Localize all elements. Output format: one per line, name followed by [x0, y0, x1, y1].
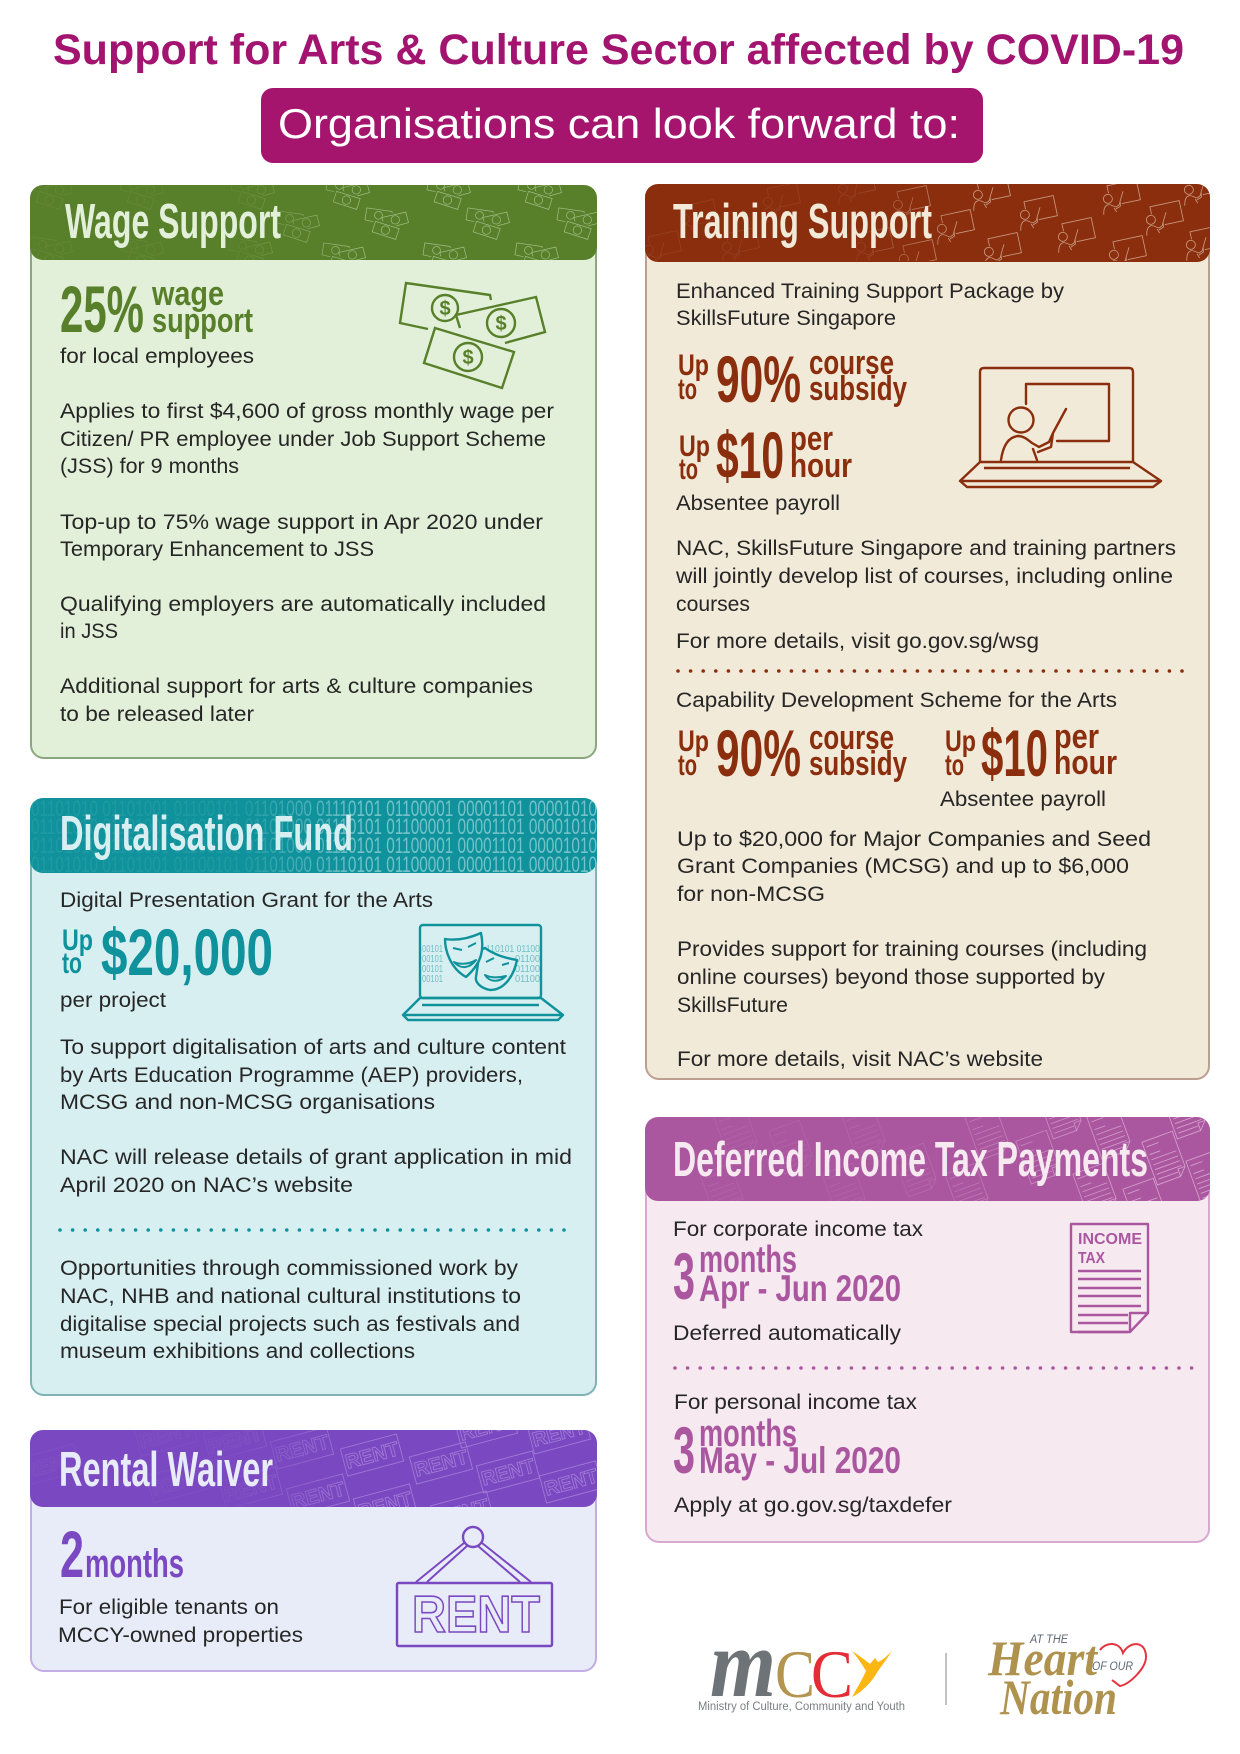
icon: laptop with theatre masks: 00101 — [422, 974, 443, 985]
text: training course details: Capability Development Scheme for the Arts — [676, 689, 1117, 712]
text: training course details: will jointly develop list of courses, including online — [675, 565, 1173, 588]
stat: up to $10 per hour (CDS): Up — [945, 725, 976, 758]
heading: rental waiver: RENT — [206, 1423, 264, 1459]
text: capability scheme details: Up to $20,000 for Major Companies and Seed — [677, 828, 1151, 851]
heading: digitalisation fund — [30, 796, 597, 877]
heading: rental waiver: RENT — [479, 1455, 537, 1491]
text: rental details — [58, 1596, 303, 1647]
stat: up to 90% course subsidy: course — [809, 344, 894, 382]
text: wage support details: Additional support for arts & culture companies — [60, 675, 533, 698]
stat: 2 months: months — [85, 1542, 184, 1586]
text: capability scheme details: SkillsFuture — [677, 994, 788, 1017]
logo: At the Heart of Our Nation: OF OUR — [1092, 1659, 1133, 1673]
icon: income tax document: TAX — [1078, 1250, 1106, 1267]
subtitle banner — [261, 88, 983, 163]
text: digitalisation details: museum exhibitions and collections — [60, 1340, 415, 1363]
panel: digitalisation fund — [30, 796, 597, 1395]
panel: wage support — [29, 178, 601, 758]
heading: rental waiver: RENT — [542, 1465, 600, 1501]
icon: banknotes: $ — [439, 298, 451, 320]
text: wage support details: Qualifying employers are automatically included — [60, 593, 546, 616]
logo: MCCY: Ministry of Culture, Community and Youth — [698, 1701, 905, 1713]
logo: At the Heart of Our Nation: AT THE — [1029, 1634, 1068, 1646]
text: capability scheme details: Provides support for training courses (including — [677, 938, 1147, 961]
icon: income tax document — [1071, 1224, 1148, 1332]
icon: laptop with theatre masks: 00101 — [422, 944, 443, 955]
text: wage support details: Temporary Enhancement to JSS — [60, 538, 374, 561]
stat: 3 months Apr - Jun 2020: Apr - Jun 2020 — [699, 1268, 901, 1309]
stat: up to $10 per hour (CDS): to — [945, 749, 964, 782]
stat: up to $10 per hour (CDS): per — [1054, 718, 1099, 756]
text: digitalisation details: NAC will release details of grant application in mid — [60, 1146, 572, 1169]
stat: up to 90% course subsidy (CDS): Up — [678, 725, 709, 758]
icon: laptop with teacher — [960, 368, 1161, 487]
logo: At the Heart of Our Nation: Nation — [999, 1669, 1117, 1725]
text: digitalisation details: Opportunities through commissioned work by — [60, 1257, 519, 1280]
stat: up to $10 per hour: Up — [679, 430, 710, 463]
text: training course details: Absentee payroll — [676, 492, 840, 515]
panel: deferred income tax payments — [645, 1117, 1210, 1543]
stat: 25% wage support: wage — [151, 275, 224, 313]
text: digitalisation details: April 2020 on NAC’s website — [60, 1174, 353, 1197]
text: wage support details: to be released later — [60, 703, 254, 726]
logo: MCCY: C — [811, 1636, 853, 1712]
stat: 25% wage support: 25% — [60, 272, 144, 346]
logo: At the Heart of Our Nation — [987, 1630, 1146, 1725]
title: Support for Arts & Culture Sector affected by COVID-19 — [53, 26, 1184, 74]
icon: laptop with theatre masks: 01100 — [515, 974, 540, 985]
icon: banknotes — [400, 283, 545, 388]
heading: rental waiver: RENT — [530, 1416, 588, 1452]
stat: up to $20,000: to — [62, 947, 82, 980]
heading: wage support — [30, 185, 597, 260]
text: enhanced training package: Enhanced Training Support Package by — [676, 280, 1065, 303]
stat: 3 months Apr - Jun 2020 — [673, 1239, 901, 1313]
text: wage support details: for local employees — [60, 345, 254, 368]
icon: laptop with theatre masks — [403, 925, 563, 1020]
text: capability scheme details: Grant Companies (MCSG) and up to $6,000 — [677, 855, 1129, 878]
heading: rental waiver: RENT — [343, 1438, 401, 1474]
text: digitalisation details — [60, 989, 575, 1363]
stat: 3 months May - Jul 2020 — [673, 1413, 901, 1487]
stat: 3 months Apr - Jun 2020: months — [699, 1239, 797, 1281]
stat: 3 months May - Jul 2020: May - Jul 2020 — [699, 1440, 901, 1481]
icon: banknotes: $ — [462, 347, 474, 369]
text: corporate income tax: For corporate income tax — [673, 1218, 924, 1241]
stat: 3 months May - Jul 2020: 3 — [673, 1413, 695, 1487]
stat: up to 90% course subsidy (CDS): 90% — [716, 716, 801, 790]
text: training course details — [675, 492, 1194, 712]
icon: banknotes: $ — [495, 313, 507, 335]
stat: up to $10 per hour: per — [790, 420, 833, 458]
subtitle banner: Organisations can look forward to: — [278, 100, 960, 147]
stat: up to 90% course subsidy (CDS) — [678, 716, 907, 790]
heading: digitalisation fund: 01101010 01101001 01100101 01101000 01110101 01100001 00001101 00001010 — [31, 833, 597, 858]
text: capability scheme details: for non-MCSG — [677, 883, 825, 906]
text: deferral notes: For personal income tax — [674, 1391, 918, 1414]
stat: up to 90% course subsidy — [678, 342, 907, 416]
panel: rental waiver — [30, 1430, 597, 1672]
stat: up to 90% course subsidy (CDS): to — [678, 749, 697, 782]
heading: digitalisation fund: 01101010 01101001 01100101 01101000 01110101 01100001 00001101 00001010 — [31, 796, 597, 821]
icon: laptop with theatre masks: 00101 — [422, 954, 443, 965]
heading: rental waiver: RENT — [222, 1471, 280, 1507]
stat: up to $20,000: Up — [62, 924, 93, 957]
heading: training support — [645, 184, 1210, 262]
text: deferral notes: Deferred automatically — [673, 1322, 902, 1345]
text: training course details: For more details, visit go.gov.sg/wsg — [676, 630, 1039, 653]
stat: up to 90% course subsidy: Up — [678, 349, 709, 382]
icon: laptop with theatre masks: 00101 — [422, 964, 443, 975]
panel: training support — [639, 170, 1225, 1079]
text: deferral notes — [673, 1322, 1197, 1414]
stat: up to $10 per hour (CDS) — [945, 716, 1117, 790]
icon: laptop with theatre masks: 01100 — [515, 954, 540, 965]
stat: up to 90% course subsidy (CDS): course — [809, 719, 894, 757]
heading: deferred income tax payments — [645, 1117, 1210, 1201]
stat: up to $10 per hour — [679, 418, 852, 492]
icon: laptop with theatre masks: 110101 01100 — [486, 944, 540, 955]
heading: digitalisation fund: 01101010 01101001 01100101 01101000 01110101 01100001 00001101 00001010 — [31, 814, 597, 839]
heading: rental waiver: RENT — [20, 1448, 78, 1484]
stat: up to $20,000: $20,000 — [101, 915, 273, 989]
text: digitalisation details: by Arts Education Programme (AEP) providers, — [60, 1064, 523, 1087]
stat: up to $10 per hour: $10 — [716, 418, 784, 492]
heading: rental waiver: RENT — [137, 1418, 195, 1454]
text: wage support details: Citizen/ PR employee under Job Support Scheme — [60, 428, 546, 451]
text: digitalisation details: per project — [60, 989, 166, 1012]
text: grant name: Digital Presentation Grant for the Arts — [60, 889, 433, 912]
text: training course details: courses — [676, 593, 750, 616]
heading: rental waiver — [30, 1430, 597, 1507]
stat: up to $20,000 — [62, 915, 273, 989]
heading: digitalisation fund: Digitalisation Fund — [60, 807, 353, 861]
logo: At the Heart of Our Nation: Heart — [987, 1630, 1099, 1686]
text: digitalisation details: To support digitalisation of arts and culture content — [60, 1036, 566, 1059]
heading: wage support: Wage Support — [65, 195, 281, 249]
stat: up to 90% course subsidy: to — [678, 373, 697, 406]
stat: up to $10 per hour: to — [679, 453, 698, 486]
logo: MCCY: m — [710, 1610, 776, 1717]
text: digitalisation details: NAC, NHB and national cultural institutions to — [60, 1285, 521, 1308]
heading: rental waiver: RENT — [412, 1446, 470, 1482]
text: capability scheme details: Absentee payroll — [940, 788, 1106, 811]
text: apply link: Apply at go.gov.sg/taxdefer — [674, 1494, 952, 1517]
text: wage support details: (JSS) for 9 months — [60, 455, 239, 478]
stat: 3 months May - Jul 2020: months — [699, 1413, 797, 1455]
stat: up to 90% course subsidy: subsidy — [809, 370, 907, 408]
text: rental details: For eligible tenants on — [59, 1596, 279, 1619]
heading: rental waiver: RENT — [149, 1465, 207, 1501]
stat: up to $10 per hour: hour — [790, 447, 852, 485]
icon: rent sign: RENT — [412, 1586, 540, 1644]
stat: 25% wage support: support — [152, 302, 253, 340]
icon: income tax document: INCOME — [1078, 1231, 1142, 1248]
stat: 25% wage support — [60, 272, 253, 346]
icon: rent sign — [397, 1527, 552, 1646]
text: enhanced training package — [676, 280, 1065, 330]
text: wage support details: Applies to first $4,600 of gross monthly wage per — [60, 400, 554, 423]
text: digitalisation details: digitalise special projects such as festivals and — [60, 1313, 520, 1336]
text: rental details: MCCY-owned properties — [58, 1624, 303, 1647]
icon: laptop with theatre masks: 01100 — [515, 964, 540, 975]
stat: up to $10 per hour (CDS): hour — [1054, 744, 1117, 782]
stat: up to 90% course subsidy (CDS): subsidy — [809, 745, 907, 783]
heading: rental waiver: Rental Waiver — [59, 1443, 273, 1497]
text: capability scheme details — [677, 788, 1151, 1071]
stat: 2 months: 2 — [60, 1517, 84, 1591]
stat: up to $10 per hour (CDS): $10 — [981, 716, 1048, 790]
heading: rental waiver: RENT — [433, 1495, 491, 1531]
logo: MCCY: C — [775, 1636, 815, 1712]
text: digitalisation details: MCSG and non-MCSG organisations — [60, 1091, 435, 1114]
heading: rental waiver: RENT — [289, 1478, 347, 1514]
text: wage support details — [60, 345, 554, 726]
text: wage support details: Top-up to 75% wage support in Apr 2020 under — [60, 511, 543, 534]
text: training course details: NAC, SkillsFuture Singapore and training partners — [676, 537, 1176, 560]
text: wage support details: in JSS — [60, 620, 118, 643]
stat: 3 months Apr - Jun 2020: 3 — [673, 1239, 695, 1313]
heading: digitalisation fund: 01101010 01101001 01100101 01101000 01110101 01100001 00001101 00001010 — [31, 852, 597, 877]
stat: up to 90% course subsidy: 90% — [716, 342, 801, 416]
stat: 2 months — [60, 1517, 184, 1591]
logo: MCCY — [698, 1610, 905, 1717]
heading: training support: Training Support — [673, 195, 932, 249]
text: enhanced training package: SkillsFuture Singapore — [676, 307, 896, 330]
text: capability scheme details: online courses) beyond those supported by — [677, 966, 1106, 989]
heading: rental waiver: RENT — [356, 1488, 414, 1524]
heading: rental waiver: RENT — [273, 1431, 331, 1467]
text: capability scheme details: For more details, visit NAC’s website — [677, 1048, 1043, 1071]
heading: rental waiver: RENT — [457, 1410, 515, 1446]
